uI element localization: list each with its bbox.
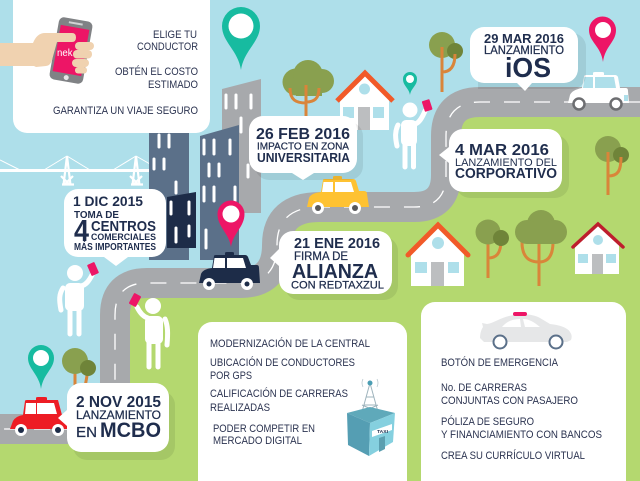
callout: 1 DIC 2015: TOMA DE [74, 209, 119, 221]
house: orange lower [408, 225, 468, 286]
buildings [149, 79, 261, 260]
callout: 26 FEB 2016 [249, 116, 363, 180]
callout: 1 DIC 2015: 4 [74, 213, 90, 248]
panel: central features: CALIFICACIÓN DE CARRERAS [210, 387, 348, 400]
callout: 21 ENE 2016 [270, 231, 398, 300]
callout: 1 DIC 2015 [64, 189, 166, 266]
panel: central features: PODER COMPETIR EN [213, 423, 315, 435]
text: steps: OBTÉN EL COSTO [115, 65, 198, 78]
pin: pink centre [218, 200, 244, 247]
car: white [568, 72, 629, 110]
callout: 2 NOV 2015: LANZAMIENTO [76, 408, 161, 422]
car: navy [199, 252, 260, 290]
callout: 4 MAR 2016: CORPORATIVO [455, 166, 557, 182]
panel: passenger features [421, 302, 626, 481]
panel: passenger features: BOTÓN DE EMERGENCIA [441, 356, 559, 369]
panel: central features: REALIZADAS [210, 402, 270, 414]
person: left [60, 262, 99, 334]
car: yellow [307, 176, 369, 214]
green ground [0, 102, 640, 481]
callout: 21 ENE 2016: FIRMA DE [294, 251, 348, 263]
callout: 21 ENE 2016: CON REDTAXZUL [291, 280, 384, 292]
car: red [10, 397, 68, 436]
callout: 29 MAR 2016: 29 MAR 2016 [484, 31, 564, 46]
house: red [573, 224, 623, 274]
tree: lower large [515, 210, 567, 286]
icon: taxi building with antenna: TAXI [377, 429, 388, 434]
callout: 2 NOV 2015: EN [76, 424, 97, 441]
person: centre [129, 293, 168, 367]
building: blue right [200, 125, 239, 260]
tree: top middle [429, 32, 463, 92]
callout: 2 NOV 2015: 2 NOV 2015 [76, 394, 161, 411]
text: steps: ELIGE TU [153, 29, 197, 41]
callout: 2 NOV 2015: MCBO [100, 418, 161, 442]
house: orange upper [337, 73, 393, 130]
text: steps: CONDUCTOR [137, 41, 198, 53]
panel: passenger features: PÓLIZA DE SEGURO [441, 415, 534, 428]
callout: 4 MAR 2016 [439, 129, 569, 198]
pin: small teal [403, 72, 417, 95]
callout: 1 DIC 2015: COMERCIALES [91, 232, 156, 243]
road [0, 102, 640, 429]
icon: gray taxi [480, 312, 572, 348]
tree: lower small [476, 220, 509, 278]
panel: central features: POR GPS [210, 370, 252, 382]
icon: taxi building with antenna [347, 379, 395, 456]
callout: 1 DIC 2015: CENTROS [91, 218, 156, 235]
tree: bottom left [62, 348, 96, 387]
panel: how it works [0, 0, 210, 133]
road dashes [0, 102, 640, 429]
panel: passenger features: CONJUNTAS CON PASAJERO [441, 395, 578, 407]
callout: 29 MAR 2016 [470, 27, 586, 91]
text: steps: GARANTIZA UN VIAJE SEGURO [53, 105, 198, 117]
nek logo: nek s [57, 48, 80, 59]
callout: 21 ENE 2016: ALIANZA [292, 261, 378, 283]
text: steps: ESTIMADO [148, 79, 198, 91]
callout: 21 ENE 2016: 21 ENE 2016 [294, 235, 380, 252]
tree: right [595, 136, 629, 195]
tree: upper centre [282, 60, 334, 116]
person: upper right [396, 99, 433, 167]
callout: 26 FEB 2016: IMPACTO EN ZONA [257, 142, 349, 152]
panel: central features: MODERNIZACIÓN DE LA CENTRAL [210, 337, 370, 350]
building: gray [222, 79, 261, 213]
callout: 26 FEB 2016: 26 FEB 2016 [256, 126, 350, 143]
callout: 29 MAR 2016: iOS [505, 52, 551, 83]
callout: 1 DIC 2015: MÁS IMPORTANTES [74, 240, 156, 253]
panel: central features [198, 322, 407, 481]
pin: bottom teal [28, 345, 54, 389]
bridge [0, 156, 150, 185]
pin: big teal [222, 7, 260, 70]
callout: 4 MAR 2016: LANZAMIENTO DEL [455, 157, 557, 169]
building: blue left [149, 133, 189, 260]
panel: passenger features: No. DE CARRERAS [441, 382, 527, 394]
icon: hand holding phone [0, 17, 94, 84]
text: steps [53, 29, 198, 117]
callout: 29 MAR 2016: LANZAMIENTO [484, 45, 564, 57]
building: dark [167, 192, 196, 248]
callout: 26 FEB 2016: UNIVERSITARIA [257, 150, 351, 165]
pin: pink top right [589, 17, 616, 62]
panel: central features: UBICACIÓN DE CONDUCTORES [210, 356, 355, 369]
panel: passenger features: Y FINANCIAMIENTO CON BANCOS [441, 429, 602, 441]
callout: 1 DIC 2015: 1 DIC 2015 [73, 193, 143, 209]
callout: 4 MAR 2016: 4 MAR 2016 [455, 142, 549, 159]
callout: 2 NOV 2015 [58, 383, 175, 460]
panel: central features: MERCADO DIGITAL [213, 435, 302, 447]
panel: passenger features: CREA SU CURRÍCULO VIRTUAL [441, 449, 585, 462]
